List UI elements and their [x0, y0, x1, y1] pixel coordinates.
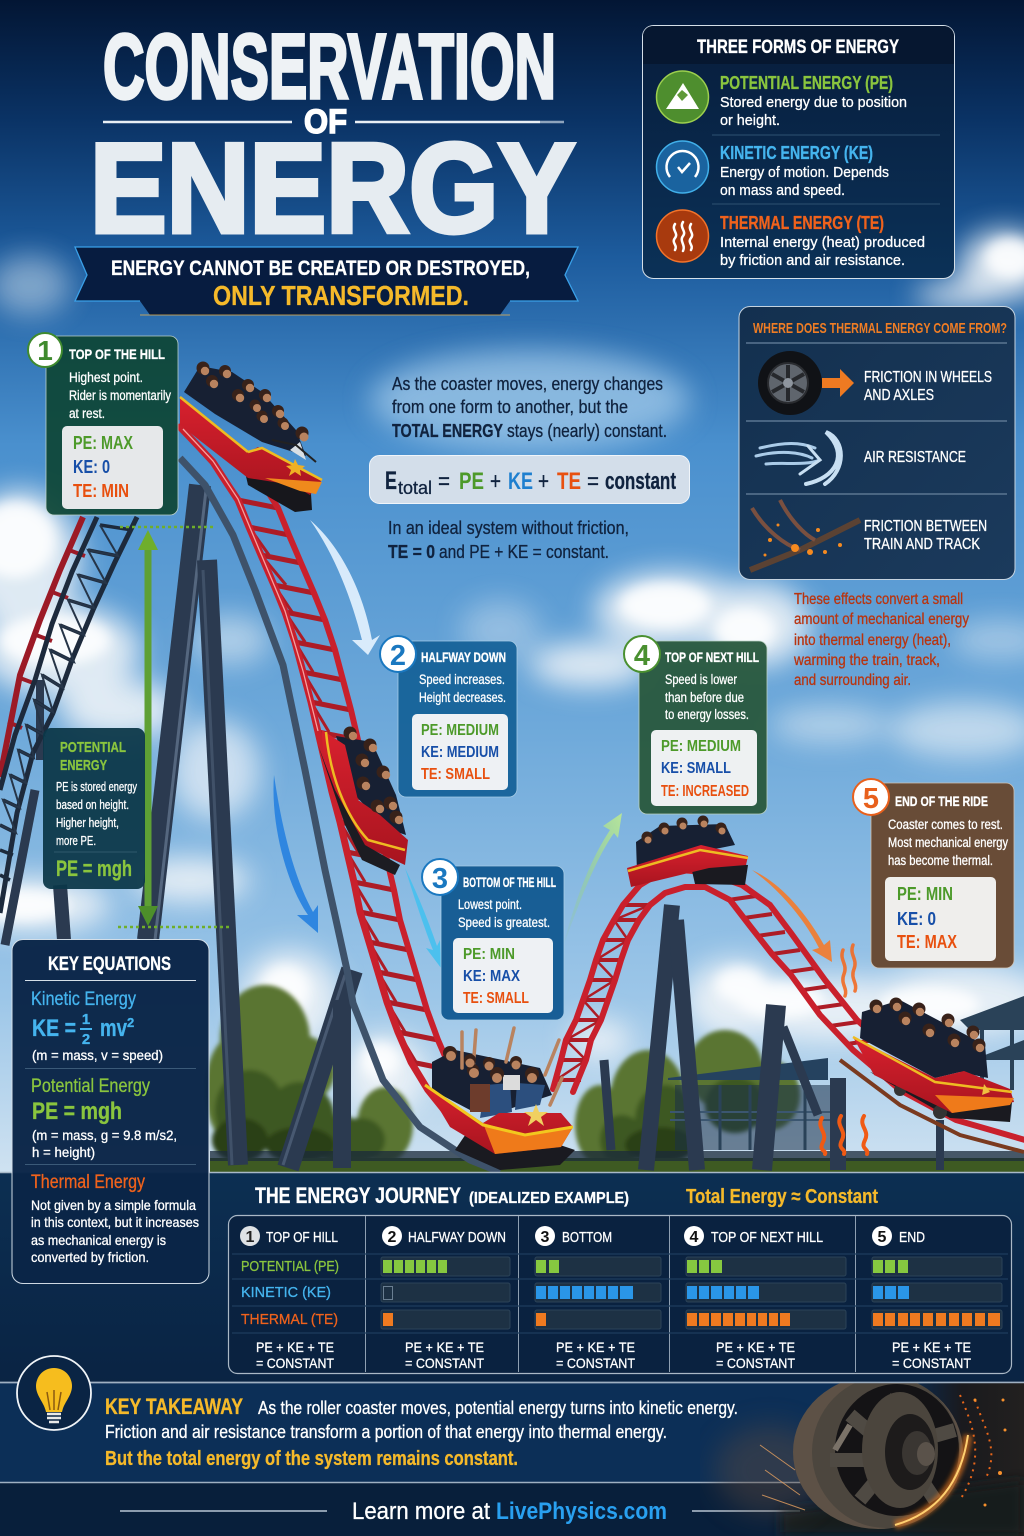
arrow: toward bottom — [405, 868, 441, 968]
column headers: BOTTOM — [562, 1229, 612, 1246]
description — [419, 672, 506, 705]
row labels: POTENTIAL (PE) — [241, 1258, 339, 1275]
column headers: TOP OF NEXT HILL — [711, 1229, 823, 1246]
thermal energy text — [720, 213, 925, 269]
heading: POTENTIAL — [60, 739, 126, 756]
constant totals: PE + KE + TE — [405, 1339, 484, 1355]
text: thermal effects note: warming the train, track, — [793, 652, 940, 669]
equation box — [370, 456, 690, 504]
panel 2: halfway down — [380, 636, 517, 797]
thermal energy text: by friction and air resistance. — [720, 252, 905, 269]
energy levels: KE: MEDIUM — [421, 744, 499, 761]
kinetic energy text: Energy of motion. Depends — [720, 164, 889, 181]
energy levels: PE: MIN — [897, 884, 953, 904]
description: Speed is lower — [665, 672, 737, 687]
panel 5: end of the ride — [853, 779, 1014, 968]
heading: TOP OF THE HILL — [69, 346, 165, 362]
constant totals: PE + KE + TE — [716, 1339, 795, 1355]
column headers: TOP OF HILL — [266, 1229, 338, 1246]
equation box: E — [385, 467, 397, 495]
panel 3: bottom of the hill — [422, 859, 564, 1020]
energy levels: KE: 0 — [73, 457, 110, 477]
footer: learn more — [352, 1498, 667, 1525]
heading: BOTTOM OF THE HILL — [463, 874, 556, 890]
heading: THREE FORMS OF ENERGY — [697, 37, 899, 58]
trees and park scenery — [205, 985, 1024, 1172]
heading: ENERGY — [60, 757, 107, 774]
text: thermal effects note: and surrounding air. — [794, 672, 911, 689]
badge 5: 5 — [863, 783, 879, 815]
column headers — [240, 1226, 925, 1246]
potential equation: (m = mass, g = 9.8 m/s2, — [32, 1127, 177, 1143]
icon: light bulb — [17, 1356, 91, 1430]
energy levels — [412, 714, 508, 790]
thermal note: Not given by a simple formula — [31, 1197, 196, 1213]
thermal energy text: Internal energy (heat) produced — [720, 234, 925, 251]
column headers: 2 — [388, 1229, 397, 1246]
potential energy bars — [383, 1260, 908, 1273]
arrow: speeding down — [273, 775, 318, 933]
heading — [60, 739, 126, 774]
potential energy text — [720, 73, 907, 129]
icon: brake wheel with sparks — [715, 1375, 1024, 1536]
text: intro paragraph: from one form to another, but the — [392, 397, 628, 417]
kinetic energy bars — [384, 1286, 909, 1300]
kinetic equation: Kinetic Energy — [31, 989, 136, 1010]
friction in wheels label — [864, 369, 992, 404]
description: Speed increases. — [419, 672, 505, 687]
energy levels: TE: SMALL — [421, 766, 490, 783]
constant totals: PE + KE + TE — [556, 1339, 635, 1355]
constant totals: = CONSTANT — [892, 1355, 971, 1371]
badge 3: 3 — [432, 863, 448, 895]
height arrow for potential energy — [118, 527, 232, 927]
panel: potential energy note — [43, 728, 145, 889]
text: ideal system — [388, 518, 629, 562]
column headers: HALFWAY DOWN — [408, 1229, 506, 1246]
potential equation: PE = mgh — [32, 1098, 122, 1125]
constant totals: = CONSTANT — [556, 1355, 635, 1371]
description: has become thermal. — [888, 853, 993, 868]
description: than before due — [665, 690, 744, 705]
title — [90, 16, 575, 259]
potential energy text: Stored energy due to position — [720, 94, 907, 111]
panel: where thermal energy comes from — [739, 306, 1015, 580]
constant totals: = CONSTANT — [405, 1355, 484, 1371]
badge 4 — [624, 636, 660, 672]
friction between train and track label: FRICTION BETWEEN — [864, 518, 987, 535]
heading: TOP OF NEXT HILL — [665, 649, 759, 665]
friction between train and track label — [864, 518, 987, 553]
kinetic equation: KE = — [32, 1015, 76, 1042]
equation box: + — [490, 468, 501, 495]
badge 5 — [853, 779, 889, 815]
kinetic energy text: on mass and speed. — [720, 182, 845, 199]
text: ideal system: and PE + KE = constant. — [439, 542, 609, 562]
heading: the energy journey — [255, 1183, 878, 1208]
kinetic equation — [31, 989, 163, 1063]
column headers: 5 — [878, 1229, 887, 1246]
constant totals: PE + KE + TE — [892, 1339, 971, 1355]
text: ideal system: TE = 0 — [388, 542, 435, 562]
description: Height decreases. — [419, 690, 506, 705]
row labels: KINETIC (KE) — [241, 1284, 331, 1301]
equation box: = — [587, 468, 599, 495]
energy levels: PE: MEDIUM — [661, 738, 741, 755]
description — [69, 370, 171, 421]
thermal note: Thermal Energy — [31, 1172, 145, 1193]
badge 3 — [422, 859, 458, 895]
panel 4: top of next hill — [624, 636, 767, 814]
heading: the energy journey: (IDEALIZED EXAMPLE) — [469, 1190, 629, 1207]
train 4 at top of next hill — [627, 816, 748, 887]
footer: learn more: LivePhysics.com — [496, 1498, 667, 1525]
formula: PE = mgh — [56, 856, 132, 881]
description: based on height. — [56, 797, 129, 812]
potential equation — [31, 1076, 177, 1160]
subtitle ribbon — [75, 247, 578, 315]
potential energy text: or height. — [720, 112, 780, 129]
text: thermal effects note: These effects convert a small — [794, 591, 963, 608]
motion arrows — [273, 520, 832, 968]
description: Higher height, — [56, 815, 119, 830]
kinetic equation: mv — [100, 1015, 128, 1042]
train 2 halfway down — [318, 726, 408, 875]
column headers: END — [899, 1229, 925, 1246]
text: thermal effects note: into thermal energy (heat), — [794, 632, 951, 649]
energy levels: KE: MAX — [463, 968, 520, 985]
text: thermal effects note — [793, 591, 969, 689]
energy levels: PE: MIN — [463, 946, 515, 963]
energy levels — [885, 877, 996, 961]
badge 1: 1 — [37, 335, 53, 366]
energy levels: KE: 0 — [897, 909, 936, 929]
description — [888, 817, 1008, 868]
constant totals: = CONSTANT — [716, 1355, 795, 1371]
constant totals: PE + KE + TE — [256, 1339, 334, 1355]
subtitle ribbon: ENERGY CANNOT BE CREATED OR DESTROYED, — [111, 257, 530, 280]
bar tracks — [381, 1257, 1002, 1329]
arrow: down first drop — [310, 520, 380, 655]
text: thermal effects note: amount of mechanical energy — [794, 611, 969, 628]
roller coaster supports — [5, 485, 940, 1170]
description — [56, 779, 137, 848]
equation box: = — [438, 468, 450, 495]
energy levels: PE: MEDIUM — [421, 722, 499, 739]
footer divider lines — [120, 1510, 800, 1512]
title: CONSERVATION — [103, 16, 556, 118]
column headers: 4 — [690, 1229, 699, 1246]
thermal note: in this context, but it increases — [31, 1214, 199, 1230]
kinetic energy text: KINETIC ENERGY (KE) — [720, 143, 873, 163]
energy levels — [62, 426, 163, 509]
callout: key takeaway text: KEY TAKEAWAY — [105, 1394, 243, 1419]
callout: key takeaway text: But the total energy of the system remains constant. — [105, 1448, 518, 1470]
badge 4: 4 — [634, 640, 650, 672]
heading: the energy journey: Total Energy ≈ Constant — [686, 1186, 878, 1208]
kinetic equation: 2 — [82, 1031, 90, 1048]
train 3 at the bottom — [425, 1028, 575, 1170]
thermal note: converted by friction. — [31, 1249, 149, 1265]
thermal energy text: THERMAL ENERGY (TE) — [720, 213, 884, 233]
text: intro paragraph: TOTAL ENERGY — [392, 421, 503, 441]
heading: KEY EQUATIONS — [48, 954, 171, 975]
equation box: total — [398, 478, 432, 498]
potential equation: Potential Energy — [31, 1076, 150, 1097]
description: Coaster comes to rest. — [888, 817, 1003, 832]
description: Highest point. — [69, 370, 143, 385]
description: PE is stored energy — [56, 779, 137, 794]
panel 1: top of the hill — [28, 333, 178, 515]
row labels: THERMAL (TE) — [241, 1311, 338, 1328]
description: Speed is greatest. — [458, 915, 550, 930]
train 1 at top of the hill — [180, 362, 322, 512]
thermal energy bars — [383, 1313, 1000, 1326]
callout: key takeaway text — [105, 1394, 738, 1470]
icon: heat flames — [820, 945, 867, 1154]
description: Lowest point. — [458, 897, 522, 912]
bottom dark band — [0, 1172, 1024, 1536]
footer: learn more: Learn more at — [352, 1498, 490, 1525]
arrow: climbing — [562, 813, 622, 950]
icon: air swoosh — [756, 432, 841, 484]
kinetic equation: (m = mass, v = speed) — [32, 1047, 163, 1063]
constant totals — [256, 1339, 971, 1371]
callout: key takeaway text: Friction and air resistance transform a portion of that energy into thermal energy. — [105, 1422, 667, 1442]
heading: the energy journey: THE ENERGY JOURNEY — [255, 1183, 461, 1208]
badge 2 — [380, 636, 416, 672]
icon: speedometer — [656, 141, 708, 193]
description — [665, 672, 749, 722]
potential equation: h = height) — [32, 1144, 95, 1160]
potential energy text: POTENTIAL ENERGY (PE) — [720, 73, 893, 93]
equation box: constant — [605, 468, 676, 495]
energy levels: PE: MAX — [73, 433, 133, 453]
row labels — [241, 1258, 339, 1328]
icon: wheel with arrow — [758, 351, 854, 415]
kinetic equation: 2 — [127, 1015, 134, 1030]
icon: star on nose — [524, 1104, 548, 1126]
left side lattice track — [0, 517, 137, 913]
subtitle ribbon: ONLY TRANSFORMED. — [213, 280, 469, 311]
main coaster track first drop — [180, 427, 510, 1172]
icon: sparking track — [750, 500, 860, 570]
text: intro paragraph: stays (nearly) constant. — [507, 421, 667, 441]
description: Rider is momentarily — [69, 388, 171, 403]
text: intro paragraph: As the coaster moves, energy changes — [392, 374, 663, 394]
text: intro paragraph — [392, 374, 667, 441]
panel: three forms of energy — [642, 26, 954, 278]
key takeaway band — [0, 1382, 1024, 1536]
energy levels: TE: MIN — [73, 481, 129, 501]
energy levels: KE: SMALL — [661, 760, 731, 777]
icon: mountain — [656, 71, 708, 123]
icon: heat waves — [656, 210, 708, 262]
heading: END OF THE RIDE — [895, 793, 988, 809]
description: more PE. — [56, 833, 96, 848]
badge 2: 2 — [390, 640, 406, 672]
energy levels: TE: SMALL — [463, 990, 529, 1007]
friction in wheels label: FRICTION IN WHEELS — [864, 369, 992, 386]
badge 1 — [28, 333, 62, 367]
energy levels — [453, 938, 553, 1013]
constant totals: = CONSTANT — [256, 1355, 334, 1371]
train 5 at the end — [853, 998, 1014, 1122]
top line of takeaway band — [0, 1382, 1024, 1384]
heading: HALFWAY DOWN — [421, 649, 506, 665]
friction in wheels label: AND AXLES — [864, 387, 934, 404]
callout: key takeaway text: As the roller coaster moves, potential energy turns into kinetic energy. — [258, 1398, 738, 1418]
thermal note — [31, 1172, 199, 1265]
energy levels: TE: INCREASED — [661, 783, 749, 800]
column headers: 1 — [246, 1229, 255, 1246]
description: at rest. — [69, 406, 105, 421]
table: energy journey chart — [228, 1216, 1012, 1374]
description — [458, 897, 550, 930]
equation box: TE — [557, 468, 581, 495]
air resistance label: AIR RESISTANCE — [864, 449, 966, 466]
title: OF — [304, 103, 347, 141]
second hill and run-out track — [553, 870, 1024, 1152]
sky background — [0, 0, 1024, 1172]
equation box: KE — [508, 468, 533, 495]
kinetic equation: 1 — [82, 1011, 90, 1028]
thermal note: as mechanical energy is — [31, 1232, 166, 1248]
title: ENERGY — [90, 117, 575, 259]
description: to energy losses. — [665, 707, 749, 722]
kinetic energy text — [720, 143, 889, 199]
energy levels: TE: MAX — [897, 932, 957, 952]
arrow: heat descent — [752, 870, 832, 962]
equation box: + — [538, 468, 549, 495]
text: ideal system: In an ideal system without friction, — [388, 518, 629, 538]
friction between train and track label: TRAIN AND TRACK — [864, 536, 981, 553]
energy levels — [651, 730, 757, 806]
panel: key equations — [12, 940, 209, 1284]
equation box: PE — [459, 468, 484, 495]
column headers: 3 — [541, 1229, 550, 1246]
